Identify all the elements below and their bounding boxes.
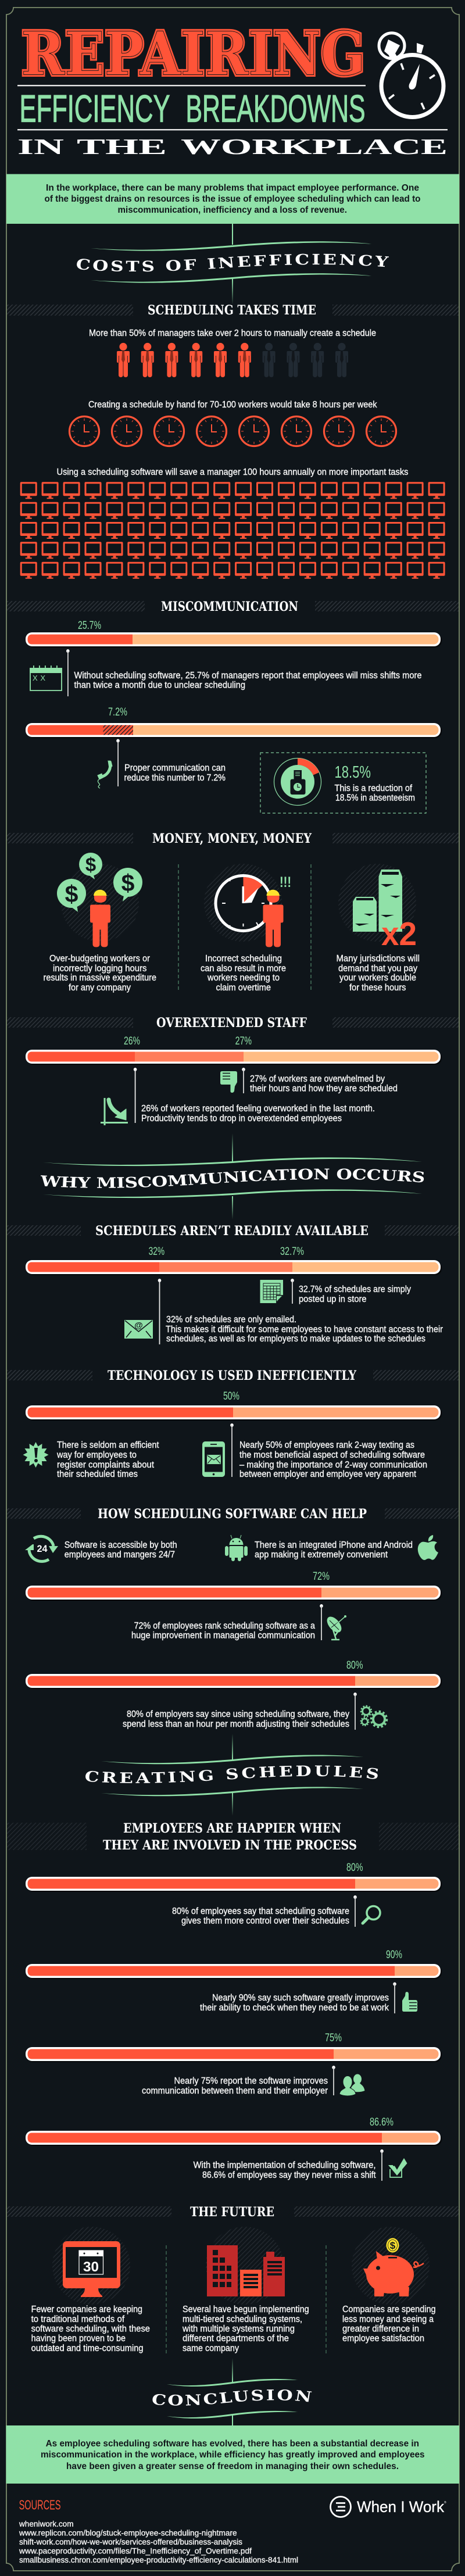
heading [7,2205,459,2220]
text: their ability to check when they need to be at work [200,2003,389,2013]
text: column 2: Several have begun implementing [183,2305,309,2314]
heading: TECHNOLOGY IS USED INEFFICIENTLY [108,1368,356,1383]
links: smallbusiness.chron.com/employee-productivity-efficiency-calculations-841.html [19,2555,298,2564]
title: efficiency breakdowns [20,87,365,130]
text: 18.5% in absenteeism [335,793,415,803]
worker [263,890,284,947]
text: 27%: their hours and how they are scheduled [250,1083,398,1094]
title: efficiency breakdowns: EFFICIENCY [20,87,170,130]
icon: 24 hours [25,1536,58,1561]
text: texting [239,1440,427,1479]
heading: MISCOMMUNICATION [161,599,298,614]
heading: SCHEDULING TAKES TIME [148,303,316,318]
title: in the workplace: IN [17,135,64,159]
banner: conclusion [152,2359,312,2425]
heading: THE FUTURE [190,2205,274,2220]
icon: email [124,1320,153,1339]
icon: buildings [206,2227,285,2305]
text: column 1: incorrectly logging hours [53,964,147,974]
pictogram: monitors [20,482,445,579]
labels: 32% [149,1245,164,1258]
stem [353,1895,357,1927]
labels: 26% [124,1035,140,1047]
section: money [7,831,459,993]
text: accessible: Software is accessible by both [65,1540,177,1550]
text: accessible [65,1540,177,1560]
text: column 2: multi-tiered scheduling systems, [183,2314,302,2324]
text [172,1906,349,1926]
labels: 32.7% [280,1245,304,1258]
text: 72%: 72% of employees rank scheduling software as a [134,1621,315,1631]
text: 26% [141,1104,375,1124]
text: gives them more control over their schedules [181,1916,349,1926]
labels: 27% [235,1035,252,1047]
stem [332,2066,335,2095]
text: column 3: Many jurisdictions will [336,954,420,964]
text: column 3: your workers double [339,973,416,983]
bar: 32% and 32.7% [26,1260,442,1275]
icon: satellite dish [324,1614,346,1640]
icon: people [339,2074,365,2096]
text: This is a reduction of [335,783,413,793]
icon: double pay stacks: x2 [381,915,417,953]
section: overextended staff [7,1015,459,1125]
label: 72%: 72% [313,1570,330,1583]
text: 86.6% of employees say they never miss a shift [202,2170,376,2180]
stem [380,2149,384,2181]
bubble [57,879,86,912]
title: in the workplace: THE [77,135,167,159]
section: technology used inefficiently [7,1368,459,1479]
text: reduce this number to 7.2% [124,773,226,783]
stem [230,1423,234,1477]
text: complaints: register complaints about [57,1460,155,1470]
logo: when i work: When I Work [357,2498,445,2516]
text: column 3: employee satisfaction [342,2334,424,2344]
text: column 2: workers needing to [207,973,280,983]
title: repairing: REPAIRING [21,19,365,90]
bubble: $ [121,870,135,896]
links: www.paceproductivity.com/files/The_Inefficiency_of_Overtime.pdf [19,2546,252,2555]
heading: HOW SCHEDULING SOFTWARE CAN HELP [98,1507,367,1522]
stem [353,1693,357,1730]
intro text: In the workplace, there can be many problems that impact employee performance. One [46,183,419,193]
stem [393,1982,396,2013]
text: 72%: huge improvement in managerial communication [131,1631,315,1640]
stem [116,739,120,786]
icon: apple [418,1535,438,1560]
text: app: There is an integrated iPhone and Android [255,1540,413,1550]
bubble: $ [85,854,96,875]
text: column 1: software scheduling, with these [31,2324,150,2334]
conclusion text [41,2439,425,2471]
icon: 24 hours: 24 [37,1543,48,1554]
text: column 3: for these hours [349,983,406,993]
text: hand schedule: Creating a schedule by hand for 70-100 workers would take 8 hours per week [88,400,377,410]
stem [66,649,70,696]
bar: 90% [26,1964,442,1979]
stems [134,1068,245,1123]
logo: when i work [330,2497,446,2517]
text: complaints [56,1440,159,1479]
label: 25.7%: 25.7% [78,619,101,632]
icon: email: @ [134,1321,143,1330]
heading [7,599,459,614]
logo: when i work: ® [444,2500,446,2505]
bubble [79,853,102,879]
text: 27% [250,1074,398,1094]
heading [7,1507,459,1522]
bar: 26% and 27% [26,1050,442,1065]
banner: costs of inefficiency [77,224,389,303]
links [19,2519,298,2564]
text: app [255,1540,413,1560]
text: column 1: to traditional methods of [31,2314,125,2324]
text: complaints: There is seldom an efficient [57,1440,159,1450]
conclusion text: have been given a greater sense of freedom in managing their own schedules. [66,2461,399,2471]
sources [19,2497,298,2564]
bar: 80% employers [26,1674,442,1689]
coin: $ [390,2240,396,2251]
text: With the implementation of scheduling software, [194,2160,375,2170]
icon: phone [98,761,112,788]
label: 75%: 75% [325,2031,342,2044]
text: texting: between employer and employee very apparent [239,1469,417,1479]
label: 50%: 50% [223,1390,239,1403]
text: 32%: This makes it difficult for some employees to have constant access to their [166,1325,443,1334]
intro text: of the biggest drains on resources is the issue of employee scheduling which can lead to [44,194,421,204]
conclusion text: miscommunication in the workplace, while efficiency has greatly improved and employees [41,2450,425,2460]
bar: 75% [26,2047,442,2062]
stat: 18.5% [335,763,371,782]
text: managers: More than 50% of managers take over 2 hours to manually create a schedule [89,328,376,338]
text: column 2: Incorrect scheduling [205,954,282,964]
text: app: app making it extremely convenient [255,1550,388,1560]
text [200,1993,389,2013]
title: in the workplace [17,135,448,159]
text: column 1: results in massive expenditure [43,973,156,983]
text: column 1 [31,2305,150,2353]
heading [7,1821,459,1853]
icon: checkmark [388,2158,407,2177]
text: communication between them and their employer [142,2086,328,2096]
bar: 25.7% [26,632,442,647]
text: Nearly 75% report the software improves [174,2076,328,2086]
text: column 1: outdated and time-consuming [31,2344,143,2353]
bar: 72% [26,1586,442,1601]
bar: 86.6% [26,2131,442,2146]
bar: 80% employees [26,1877,442,1892]
donut: 18.5% [274,758,321,806]
text: 80% employers [123,1709,349,1729]
icon: piggy bank [352,2227,430,2305]
text: texting: Nearly 50% of employees rank 2-way texting as [239,1440,414,1450]
text: texting: the most beneficial aspect of scheduling software [239,1450,425,1460]
label: 80%: 80% [346,1861,363,1874]
icon: schedule sheet [260,1280,283,1303]
text: 32.7% [299,1285,411,1304]
section: miscommunication [7,599,459,813]
stems [158,1279,294,1344]
worker [90,890,110,947]
heading [7,1015,459,1031]
icon: monitor calendar: 30 [83,2259,99,2275]
labels [149,1245,304,1258]
icon: worker with money bubbles [57,853,142,947]
text: column 1: having been proven to be [31,2334,126,2344]
text: complaints: way for employees to [56,1450,137,1460]
heading: MONEY, MONEY, MONEY [152,831,312,846]
links: www.replicon.com/blog/stuck-employee-scheduling-nightmare [19,2528,237,2538]
heading [7,831,459,846]
bubble: $ [65,881,78,907]
callout: absenteeism [260,753,426,813]
title: repairing: REPAIRING [21,19,365,90]
banner: costs of inefficiency: COSTS OF INEFFICIENCY [77,253,389,272]
exclamations: !!! [280,874,291,890]
title: in the workplace: WORKPLACE [181,135,448,159]
section: schedules not available [7,1223,459,1344]
heading: OVEREXTENDED STAFF [156,1015,307,1031]
text: column 3 [336,954,420,993]
text: 32% [166,1315,443,1344]
icon: thumbs up [402,1992,417,2012]
icon: calendar: XX [33,674,45,682]
icon: calendar [30,666,62,690]
label: 80%: 80% [346,1659,363,1672]
text: 32.7%: 32.7% of schedules are simply [299,1285,411,1294]
text: column 3 [342,2305,436,2344]
heading [7,1223,459,1239]
heading [7,303,459,318]
text: 32%: schedules, as well as for employers to make updates to the schedules [166,1334,425,1344]
label: 86.6%: 86.6% [370,2116,394,2128]
text: texting: – making the importance of 2-way communication [239,1460,427,1470]
text: 27%: 27% of workers are overwhelmed by [250,1074,385,1084]
title block [17,19,448,159]
links: wheniwork.com [19,2519,73,2528]
pictogram: clocks [70,416,396,446]
heading: SCHEDULES AREN’T READILY AVAILABLE [95,1223,369,1239]
icon: double pay stacks [338,864,417,953]
label: 90%: 90% [386,1948,402,1961]
heading: THEY ARE INVOLVED IN THE PROCESS [103,1838,357,1853]
text: column 2 [201,954,286,993]
banner: conclusion: CONCLUSION [152,2389,312,2406]
banner: why miscommunication occurs [41,1135,424,1218]
text: 80% of employees say that scheduling software [172,1906,349,1916]
text: column 3: Companies are spending [342,2305,436,2314]
icon: android [225,1535,248,1561]
text: software saves: Using a scheduling software will save a manager 100 hours annually on more important tasks [57,467,409,477]
text: 80% employers: 80% of employers say since using scheduling software, they [127,1709,349,1719]
text: Without scheduling software, 25.7% of managers report that employees will miss shifts more [74,671,422,681]
icon: mobile message [202,1441,225,1477]
text: Proper communication can [124,763,226,773]
text: Nearly 90% say such software greatly improves [212,1993,389,2003]
text [142,2076,328,2096]
conclusion panel [6,2425,459,2484]
icon: gears [360,1706,387,1727]
text [124,763,226,783]
section: employees happier [7,1821,459,2181]
section: how software can help [7,1507,459,1730]
section: the future [7,2205,459,2356]
heading: SOURCES [19,2497,61,2512]
text: column 2 [182,2305,309,2353]
bar: 50% [26,1405,442,1421]
icon: falling chart [101,1098,128,1125]
text: column 1 [43,954,156,993]
text: column 3: less money and seeing a [342,2314,434,2324]
text: column 2: with multiple systems running [182,2324,295,2334]
text: column 2: different departments of the [183,2334,289,2344]
label: 7.2%: 7.2% [108,706,127,718]
text: column 2: same company [183,2344,239,2353]
intro text [44,183,421,215]
icon: monitor calendar [52,2227,130,2305]
intro text: miscommunication, inefficiency and a loss of revenue. [117,205,347,215]
text: 32%: 32% of schedules are only emailed. [166,1315,296,1325]
text: accessible: employees and mangers 24/7 [65,1550,175,1560]
text: complaints: their scheduled times [57,1469,138,1479]
icon: overtime clock with worker [204,864,291,947]
text: column 1: Over-budgeting workers or [49,954,150,964]
icon: magnifier [363,1906,380,1923]
icon: stopwatch [379,33,443,117]
text: column 1: for any company [69,983,131,993]
links: shift-work.com/how-we-work/services-offered/business-analysis [19,2537,242,2546]
heading [7,1368,459,1383]
text: column 2: claim overtime [216,983,271,993]
text: 72% [131,1621,315,1640]
text [194,2160,376,2180]
icon: thumbs down [220,1071,237,1093]
pictogram: managers [117,343,348,377]
icon: burst [23,1442,49,1468]
heading: EMPLOYEES ARE HAPPIER WHEN [123,1821,341,1836]
text: than twice a month due to unclear scheduling [74,680,245,690]
text: column 1: Fewer companies are keeping [31,2305,142,2314]
bar: 7.2% [26,723,442,738]
banner: creating schedules [85,1735,378,1815]
stem [320,1604,323,1640]
banner: creating schedules: CREATING SCHEDULES [85,1766,378,1783]
intro panel [6,174,459,224]
conclusion text: As employee scheduling software has evolved, there has been a substantial decrease in [46,2439,419,2449]
text: 26%: 26% of workers reported feeling overworked in the last month. [141,1104,375,1114]
labels [124,1035,252,1047]
text [335,783,415,803]
text: column 3: demand that you pay [338,964,417,974]
text: 80% employers: spend less than an hour per month adjusting their schedules [123,1719,349,1729]
banner: why miscommunication occurs: WHY MISCOMMUNICATION OCCURS [41,1168,424,1188]
bubble [113,868,142,901]
text: 32.7%: posted up in store [299,1294,366,1304]
section: scheduling takes time [7,303,459,579]
text: 26%: Productivity tends to drop in overextended employees [141,1114,342,1124]
dividers [166,2245,326,2356]
text: column 2: can also result in more [201,964,286,974]
title: efficiency breakdowns: BREAKDOWNS [186,87,365,130]
text [74,671,422,690]
text: column 3: greater difference in [342,2324,419,2334]
dividers [178,864,311,992]
